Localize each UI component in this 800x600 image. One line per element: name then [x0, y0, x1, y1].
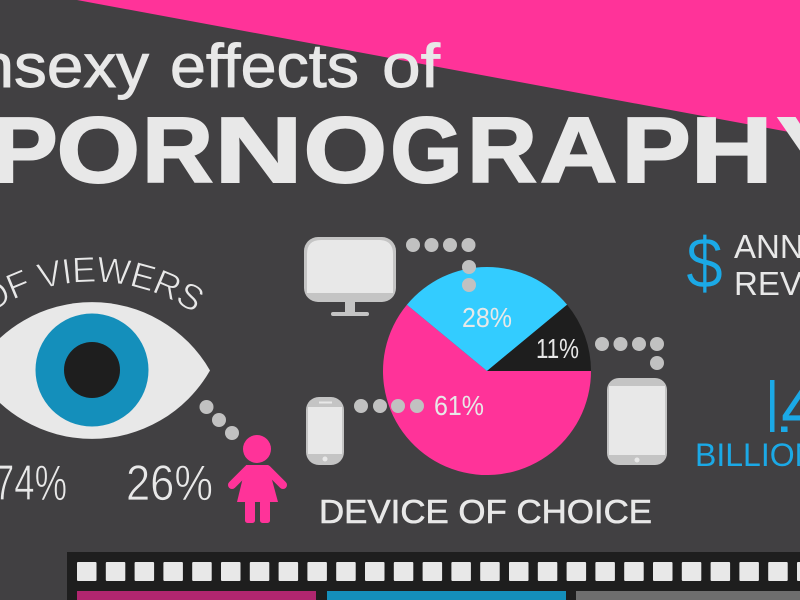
icon: eye [0, 302, 210, 439]
pie label: 28%: 28% [462, 302, 512, 333]
film frame: gray [576, 591, 800, 600]
stat: 14 [770, 380, 800, 432]
connector dots: eye to female icon [200, 400, 239, 440]
pie label: 11%: 11% [536, 333, 579, 364]
title line: pornography: G [390, 98, 463, 202]
title line: pornography: N [214, 98, 303, 202]
stat: 14: 1 [750, 365, 791, 448]
title line: pornography: O [57, 98, 140, 202]
icon: smartphone [306, 397, 344, 465]
panel: film strip [67, 552, 800, 600]
title line: unsexy effects of: of [382, 32, 441, 100]
curved heading: of viewers [0, 257, 202, 310]
panel: device of choice [304, 237, 667, 530]
pie chart [383, 267, 591, 475]
connector dots: tablet [595, 337, 664, 370]
title line: unsexy effects of: effects [170, 32, 359, 100]
title line: pornography: O [304, 98, 387, 202]
connector dots: smartphone [354, 399, 424, 413]
title line: pornography: R [467, 98, 537, 202]
heading: device of choice: DEVICE OF CHOICE [319, 493, 652, 530]
title line: pornography: A [540, 98, 617, 202]
film frame: blue [327, 591, 566, 600]
icon: female figure [232, 435, 283, 523]
connector dots: monitor [406, 238, 476, 292]
icon: dollar sign: $ [686, 224, 723, 304]
film sprocket holes [77, 562, 800, 581]
pie label: 61%: 61% [434, 390, 484, 421]
title line: pornography: R [142, 98, 213, 202]
panel: eye statistic [0, 257, 287, 523]
icon: desktop monitor [304, 237, 396, 316]
pink corner banner [77, 0, 800, 134]
stat: 26%: 26% [126, 455, 213, 511]
film frame: magenta [77, 591, 316, 600]
icon: tablet [607, 378, 667, 465]
title line: pornography: H [691, 98, 773, 202]
panel: annual revenue [686, 224, 800, 473]
title line: pornography: P [622, 98, 691, 202]
